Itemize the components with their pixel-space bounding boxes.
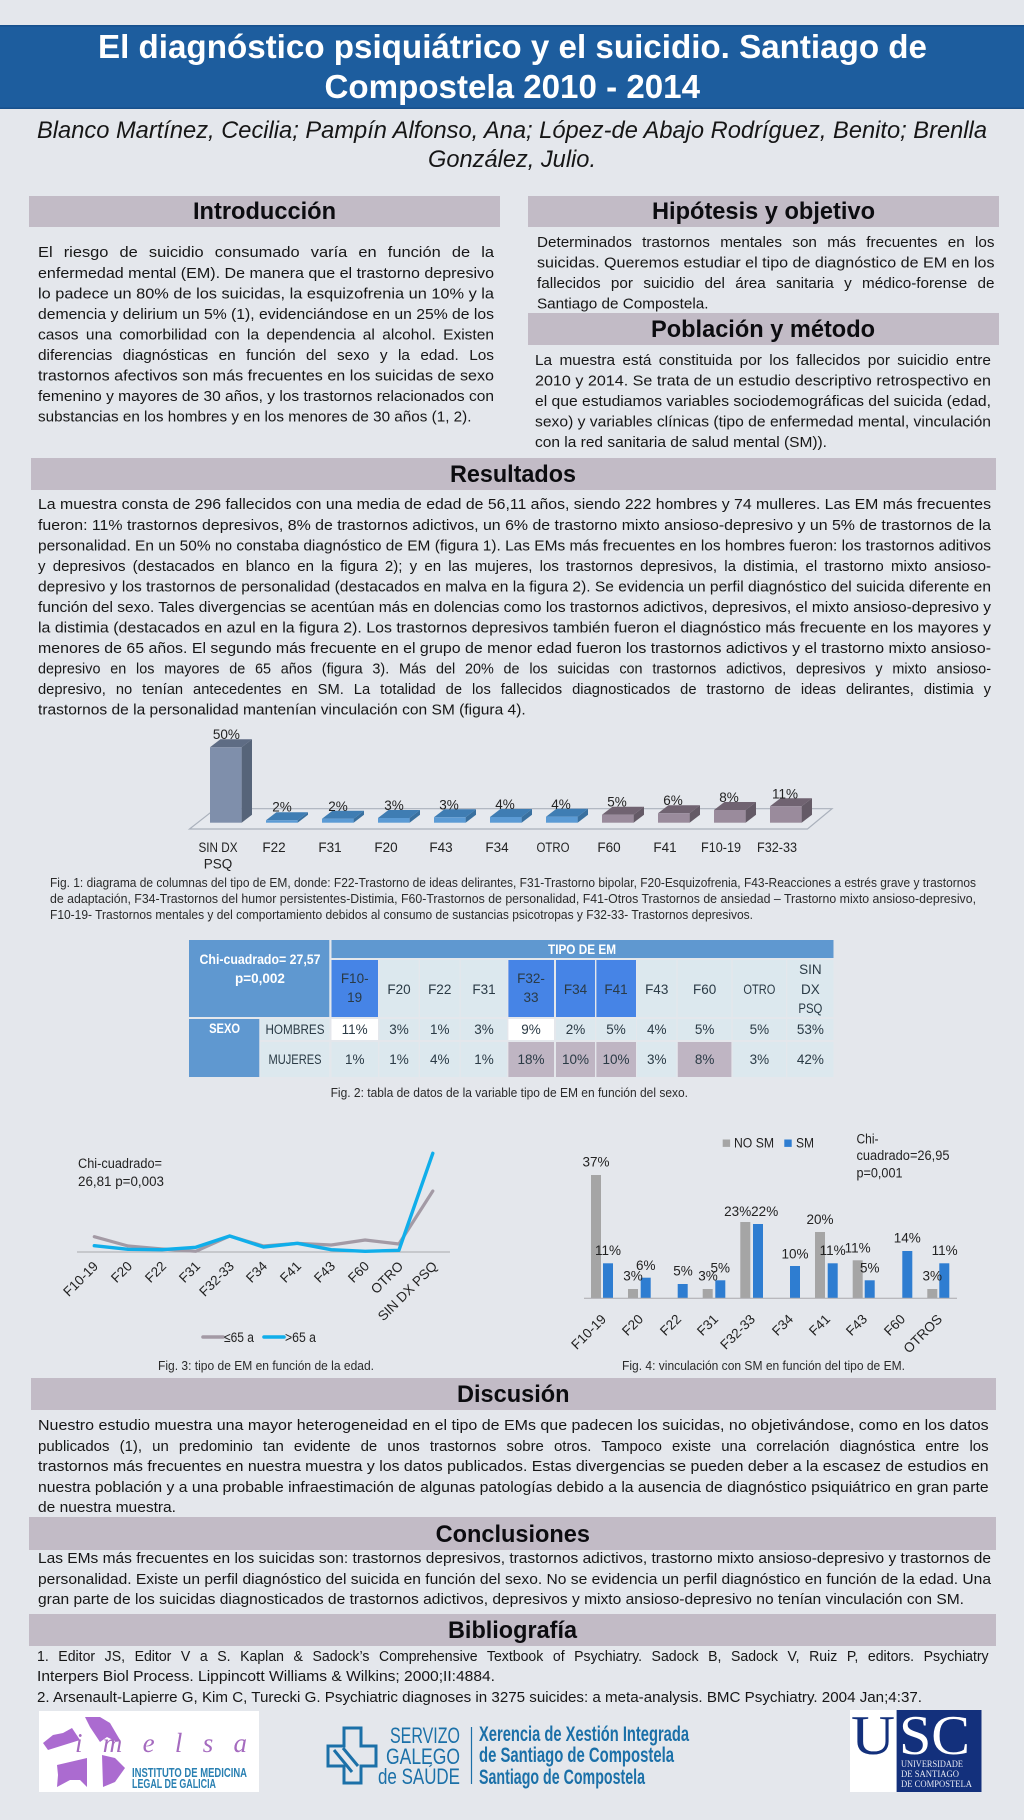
text: resultados: y depresivos (destacados en blanco en la figura 2); y en las mujeres, los trastornos depresivos, la distimia, el trastorno mixto ansioso- — [38, 558, 991, 575]
value labels: 50% — [213, 727, 240, 742]
caption: figure 3: Fig. 3: tipo de EM en función de la edad. — [158, 1358, 374, 1373]
table row: mujeres: 1% — [345, 1052, 364, 1067]
x axis labels: F20 — [108, 1259, 135, 1286]
text: resultados: La muestra consta de 296 fallecidos con una media de edad de 56,11 años, siendo 222 hombres y 74 mulleres. Las EM más frecuentes — [38, 496, 991, 513]
table column headers: F10- — [341, 971, 369, 986]
heading: hipótesis y objetivo — [528, 196, 999, 227]
text: población y método: el que estudiamos variables sociodemográficas del suicida (edad, — [535, 393, 991, 410]
text: resultados: depresivo, no tenían antecedentes en SM. La totalidad de los fallecidos diagnosticados de trastorno de ideas delirantes, distimia y — [38, 681, 991, 698]
axis labels — [198, 840, 797, 872]
heading: discusión: Discusión — [457, 1381, 570, 1408]
title banner — [0, 25, 1024, 109]
bar: F32-33 11% — [770, 798, 812, 823]
value labels: 3% — [923, 1269, 942, 1284]
table row: hombres: 5% — [606, 1022, 626, 1037]
table row: mujeres: 1% — [474, 1052, 494, 1067]
value labels: 10% — [781, 1246, 809, 1261]
table column headers: F43 — [645, 982, 668, 997]
table column headers: F31 — [472, 982, 496, 997]
table column headers: 33 — [523, 990, 539, 1005]
text: conclusiones: Las EMs más frecuentes en los suicidas son: trastornos depresivos, trastornos adictivos, trastorno mixto ansioso-depresivo y trastornos de — [38, 1550, 991, 1567]
authors: Blanco Martínez, Cecilia; Pampín Alfonso, Ana; López-de Abajo Rodríguez, Benito; Brenlla — [37, 117, 987, 144]
legend: ≤65 a — [224, 1330, 254, 1345]
x axis labels: F43 — [843, 1312, 870, 1339]
value labels: 3% — [439, 798, 459, 813]
table row: mujeres: 42% — [797, 1052, 824, 1067]
value labels: 5% — [711, 1260, 730, 1275]
text: introducción: femenino y mayores de 30 años, y los trastornos relacionados con — [38, 388, 494, 405]
table column headers: PSQ — [798, 1001, 822, 1016]
text: población y método: sexo) y variables clínicas (tipo de enfermedad mental, vinculación — [535, 414, 991, 430]
table row header: sexo: SEXO — [209, 1021, 240, 1036]
bar: F34 4% — [490, 809, 532, 823]
table row: hombres: HOMBRES — [266, 1022, 324, 1037]
value labels — [213, 727, 798, 814]
table column headers: F32- — [517, 971, 545, 986]
value labels: 5% — [673, 1264, 693, 1279]
value labels: 4% — [551, 797, 571, 812]
legend: SM — [796, 1136, 814, 1150]
value labels: 8% — [719, 790, 739, 805]
table row: hombres: 1% — [430, 1022, 449, 1037]
value labels: 3% — [623, 1269, 643, 1284]
text: hipótesis y objetivo: Santiago de Compostela. — [537, 296, 708, 312]
value labels: 14% — [894, 1231, 921, 1246]
text: resultados: función del sexo. Tales divergencias se acentúan más en dolencias como los trastornos adictivos, depresivos, el mixto ansioso-depresivo y — [38, 599, 992, 616]
value labels: 2% — [328, 799, 348, 814]
value labels: 11% — [932, 1243, 958, 1258]
heading: conclusiones — [29, 1517, 996, 1550]
axis labels: F32-33 — [757, 840, 797, 855]
text: discusión: nuestra población y a una probable infraestimación de algunas patologías debido a la ausencia de diagnóstico psiquiátrico en gran parte — [38, 1479, 989, 1496]
text: introducción: El riesgo de suicidio consumado varía en función de la — [38, 244, 495, 261]
logo: Servizo Galego de Saúde: SERVIZO — [390, 1723, 460, 1748]
value labels: 23% — [724, 1204, 751, 1219]
table column headers: F34 — [564, 982, 588, 997]
x axis labels: F60 — [881, 1312, 908, 1339]
heading: hipótesis y objetivo: Hipótesis y objetivo — [652, 198, 875, 225]
logo: USC: U — [851, 1705, 895, 1767]
x axis labels: F32-33 — [196, 1259, 237, 1299]
bar: F31 2% — [322, 811, 364, 823]
heading: discusión — [31, 1378, 996, 1410]
value labels: 20% — [806, 1212, 834, 1227]
axis labels: SIN DX — [198, 840, 238, 855]
table column headers: DX — [801, 982, 820, 997]
line: over 65 years — [94, 1153, 433, 1251]
table row: mujeres: 10% — [602, 1052, 630, 1067]
legend — [203, 1330, 316, 1345]
text: discusión: trastornos más frecuentes en nuestra muestra y los datos publicados. Estas divergencias se pueden deber a la escasez de estudios en — [38, 1458, 989, 1475]
text: discusión: Nuestro estudio muestra una mayor heterogeneidad en el tipo de EMs que padecen los suicidas, no objetivándose, como en los datos — [38, 1417, 989, 1434]
text: discusión: de nuestra muestra. — [38, 1499, 176, 1516]
logo: IMELGA — [39, 1711, 259, 1792]
table row: hombres: 2% — [566, 1022, 585, 1037]
annotation: chi-square — [856, 1132, 950, 1180]
table column headers: F60 — [693, 982, 716, 997]
icon: cross — [328, 1728, 376, 1783]
value labels: 3% — [698, 1269, 718, 1284]
annotation: chi-square: p=0,001 — [856, 1166, 902, 1180]
axis labels: F10-19 — [701, 840, 741, 855]
panel: bibliografía — [29, 1614, 996, 1706]
text: resultados: la distimia (destacados en azul en la figura 2). Los trastornos depresivos también fueron el diagnóstico más frecuente en los mayores y — [38, 620, 992, 636]
caption: figure 4: Fig. 4: vinculación con SM en función del tipo de EM. — [622, 1358, 905, 1373]
panel: hipótesis y objetivo — [528, 196, 999, 312]
table corner: chi-square: p=0,002 — [235, 971, 285, 986]
annotation: chi-square: Chi- — [856, 1132, 878, 1146]
text: resultados: menores de 65 años. El segundo más frecuente en el grupo de menor edad fueron los trastornos adictivos y el trastorno mixto ansioso- — [38, 640, 991, 657]
text: conclusiones: gran parte de los suicidas diagnosticados de trastornos adictivos, depresivos y mixto ansioso-depresivo no tenían vinculación con SM. — [38, 1591, 964, 1608]
text: población y método: con la red sanitaria de salud mental (SM)). — [535, 434, 827, 451]
table row: mujeres: 3% — [647, 1052, 666, 1067]
logo: IMELGA: INSTITUTO DE MEDICINA — [132, 1766, 247, 1780]
axis labels: F22 — [262, 840, 286, 855]
bar: F60 5% — [602, 807, 644, 823]
table row: mujeres — [260, 1042, 834, 1077]
heading: población y método — [528, 313, 999, 345]
logo: IMELGA: imelsa — [75, 1728, 247, 1758]
text: introducción: trastornos afectivos son más frecuentes en los suicidas de sexo — [38, 368, 494, 384]
logo: Servizo Galego de Saúde — [328, 1723, 689, 1789]
table column headers: F41 — [604, 982, 628, 997]
value labels: 5% — [860, 1260, 879, 1275]
heading: conclusiones: Conclusiones — [436, 1521, 590, 1548]
value labels: 6% — [663, 793, 683, 808]
text: introducción: diferencias diagnósticas en función del sexo y la edad. Los — [38, 347, 494, 364]
bar: OTRO 4% — [546, 809, 588, 823]
table row: mujeres: 1% — [389, 1052, 409, 1067]
bar: F20 3% — [378, 810, 420, 823]
value labels: 11% — [845, 1240, 871, 1255]
axis labels: F43 — [429, 840, 453, 855]
value labels: 22% — [751, 1204, 778, 1219]
table row: hombres: 3% — [474, 1022, 494, 1037]
text: resultados: depresivo y los trastornos de personalidad (destacados en malva en la figura 2). Se evidencia un perfil diagnóstico del suicida diferente en — [38, 578, 991, 596]
text: resultados — [38, 496, 992, 718]
panel: población y método — [528, 313, 999, 451]
bar: F22 2% — [266, 812, 308, 823]
logo: USC: DE SANTIAGO — [901, 1769, 959, 1779]
text: hipótesis y objetivo — [537, 234, 994, 312]
text: introducción: substancias en los hombres y en los menores de 30 años (1, 2). — [38, 408, 472, 426]
text: discusión: publicados (1), un predominio tan evidente de unos trastornos sobre otros. Tampoco existe una correlación diagnóstica entre los — [38, 1438, 989, 1455]
legend: NO SM — [734, 1136, 774, 1150]
text: población y método: La muestra está constituida por los fallecidos por suicidio entre — [535, 352, 991, 369]
value labels: 37% — [582, 1155, 610, 1170]
panel: discusión — [31, 1378, 996, 1516]
axis labels: F60 — [597, 840, 621, 855]
value labels: 11% — [595, 1243, 621, 1258]
text: bibliografía — [37, 1648, 989, 1706]
value labels: 5% — [607, 795, 627, 810]
logo: Servizo Galego de Saúde: de SAÚDE — [378, 1764, 460, 1789]
authors: González, Julio. — [428, 146, 596, 173]
value labels: 11% — [820, 1243, 846, 1258]
text: resultados: personalidad. En un 50% no constaba diagnóstico de EM (figura 1). Las EMs más frecuentes en los hombres fueron: los trastornos aditivos — [38, 538, 991, 554]
x axis labels: F34 — [769, 1311, 796, 1339]
annotation: chi-square: 26,81 p=0,003 — [78, 1174, 164, 1189]
text: resultados: trastornos de la personalidad mantenían vinculación con SM (figura 4). — [38, 702, 526, 718]
chart: figure 3, line chart — [60, 1153, 450, 1345]
x axis labels: F22 — [142, 1259, 169, 1286]
legend — [723, 1136, 814, 1150]
x axis labels: F32-33 — [717, 1312, 758, 1352]
text: introducción: casos una comorbilidad con la dependencia al alcohol. Existen — [38, 326, 494, 344]
x axis labels: F10-19 — [568, 1312, 609, 1352]
logo: Servizo Galego de Saúde: Xerencia de Xestión Integrada — [479, 1723, 689, 1746]
bar: SIN DX PSQ 50% — [210, 739, 252, 823]
x axis labels: F34 — [243, 1258, 270, 1286]
heading: resultados — [31, 458, 996, 490]
table row: mujeres: 18% — [517, 1052, 545, 1067]
table column headers: OTRO — [743, 982, 775, 997]
text: discusión — [38, 1417, 989, 1516]
x axis labels: OTROS — [901, 1312, 945, 1356]
table column headers: F20 — [387, 982, 411, 997]
x axis labels: F60 — [345, 1259, 372, 1286]
text: resultados: depresivo en los mayores de 65 años (figura 3). Más del 20% de los suicidas con trastornos adictivos, depresivos y mixto ansioso- — [38, 660, 991, 678]
table row: mujeres: MUJERES — [268, 1052, 322, 1067]
caption: figure 1: de adaptación, F34-Trastornos del humor persistentes-Distimia, F60-Trastornos de personalidad, F41-Otros Trastornos de ansiedad – Trastorno mixto ansioso-depresivo, — [50, 891, 976, 906]
panel: resultados — [31, 458, 996, 1373]
text: resultados: fueron: 11% trastornos depresivos, 8% de trastornos adictivos, un 6% de trastorno mixto ansioso-depresivo y un 5% de trastornos de la — [38, 517, 992, 534]
bar: F41 6% — [658, 805, 700, 823]
text: introducción: demencia y delirium un 5% (1), evidenciándose en un 25% de los — [38, 306, 494, 323]
table row: hombres: 53% — [797, 1022, 824, 1037]
caption: figure 1: F10-19- Trastornos mentales y del comportamiento debidos al consumo de sustancias psicotropas y F32-33- Trastornos depresivos. — [50, 907, 753, 922]
logo: Servizo Galego de Saúde: GALEGO — [386, 1744, 460, 1769]
text: introducción: lo padece un 80% de los suicidas, la esquizofrenia un 10% y la — [38, 286, 495, 302]
heading: bibliografía: Bibliografía — [448, 1617, 578, 1644]
bar: F43 3% — [434, 809, 476, 823]
logo: Servizo Galego de Saúde: de Santiago de Compostela — [479, 1744, 674, 1767]
chart: figure 4, clustered columns — [568, 1132, 958, 1356]
bar: F10-19 8% — [714, 802, 756, 823]
table row: hombres: 4% — [647, 1022, 666, 1037]
chart: figure 1, 3D columns — [190, 727, 832, 872]
axis labels: OTRO — [536, 840, 570, 855]
x axis labels: F10-19 — [60, 1259, 101, 1299]
logo: USC: SC — [899, 1705, 970, 1767]
text: conclusiones — [38, 1550, 992, 1608]
annotation: chi-square — [78, 1156, 164, 1189]
axis labels: F20 — [374, 840, 398, 855]
table row header: sexo — [189, 1019, 259, 1077]
axis labels: F41 — [653, 840, 677, 855]
x axis labels — [60, 1258, 440, 1324]
heading: introducción — [29, 196, 500, 227]
x axis labels: F31 — [694, 1312, 721, 1339]
value labels — [582, 1155, 958, 1284]
heading: resultados: Resultados — [450, 461, 576, 488]
value labels: 6% — [636, 1258, 655, 1273]
table: figure 2 — [189, 940, 834, 1077]
axis labels: PSQ — [204, 856, 232, 872]
line: up to 65 years — [94, 1191, 433, 1251]
table header: tipo de EM: TIPO DE EM — [548, 942, 616, 957]
panel: introducción — [29, 196, 500, 426]
table row: mujeres: 3% — [750, 1052, 769, 1067]
text: introducción: enfermedad mental (EM). De manera que el trastorno depresivo — [38, 265, 494, 282]
logo: Servizo Galego de Saúde: Santiago de Compostela — [479, 1766, 645, 1789]
table column headers — [332, 960, 834, 1017]
x axis labels: F20 — [619, 1312, 646, 1339]
table column headers: 19 — [347, 990, 362, 1005]
table row: mujeres: 10% — [562, 1052, 589, 1067]
x axis labels — [568, 1311, 945, 1356]
x axis labels: F41 — [277, 1259, 304, 1286]
table corner: chi-square: Chi-cuadrado= 27,57 — [200, 952, 320, 967]
table row: hombres: 5% — [750, 1022, 769, 1037]
bars: no SM — [591, 1175, 937, 1298]
logo: USC: UNIVERSIDADE — [901, 1759, 963, 1769]
text: conclusiones: personalidad. Existe un perfil diagnóstico del suicida en función del sexo. No se evidencia un perfil diagnóstico en función de la edad. Una — [38, 1571, 992, 1588]
x axis labels: OTRO — [368, 1259, 406, 1297]
value labels: 3% — [384, 798, 404, 813]
panel: conclusiones — [29, 1517, 996, 1608]
text: hipótesis y objetivo: fallecidos por suicidio del área sanitaria y médico-forense de — [537, 275, 994, 292]
logo: USC: DE COMPOSTELA — [901, 1779, 972, 1789]
caption: figure 1 — [50, 875, 976, 922]
table corner: chi-square — [189, 940, 329, 1017]
x axis labels: F41 — [806, 1312, 833, 1339]
table column headers: SIN — [799, 962, 822, 977]
axis labels: F31 — [318, 840, 342, 855]
text: introducción — [38, 244, 495, 426]
value labels: 4% — [495, 797, 515, 812]
text: hipótesis y objetivo: suicidas. Queremos estudiar el tipo de diagnóstico de EM en los — [537, 254, 994, 272]
text: bibliografía: Interpers Biol Process. Lippincott Williams & Wilkins; 2000;II:4884. — [37, 1668, 495, 1685]
title banner: Compostela 2010 - 2014 — [324, 68, 701, 105]
annotation: chi-square: Chi-cuadrado= — [78, 1156, 162, 1171]
table row: mujeres: 4% — [430, 1052, 449, 1067]
table row: mujeres: 8% — [695, 1052, 714, 1067]
heading: población y método: Población y método — [651, 316, 875, 343]
logo: USC — [850, 1705, 982, 1792]
x axis labels: F31 — [176, 1259, 203, 1286]
table header: tipo de EM — [332, 940, 834, 958]
legend: >65 a — [285, 1330, 316, 1345]
table row: hombres — [260, 1019, 834, 1040]
heading: bibliografía — [29, 1614, 996, 1646]
value labels: 2% — [272, 799, 292, 814]
table row: hombres: 11% — [342, 1022, 368, 1037]
table row: hombres: 5% — [695, 1022, 714, 1037]
text: bibliografía: 2. Arsenault-Lapierre G, Kim C, Turecki G. Psychiatric diagnoses in 3275 suicides: a meta-analysis. BMC Psychiatry. 2004 Jan;4:37. — [37, 1689, 922, 1706]
authors — [37, 117, 987, 173]
x axis labels: SIN DX PSQ — [375, 1259, 440, 1324]
text: población y método: 2010 y 2014. Se trata de un estudio descriptivo retrospectivo en — [535, 372, 991, 390]
table row: hombres: 3% — [389, 1022, 409, 1037]
table row: hombres: 9% — [521, 1022, 541, 1037]
title banner: El diagnóstico psiquiátrico y el suicidio. Santiago de — [98, 28, 927, 65]
bars: SM — [603, 1224, 949, 1298]
text: población y método — [535, 352, 991, 451]
caption: figure 2: Fig. 2: tabla de datos de la variable tipo de EM en función del sexo. — [331, 1085, 688, 1100]
heading: introducción: Introducción — [193, 198, 336, 225]
text: bibliografía: 1. Editor JS, Editor V a S. Kaplan & Sadock’s Comprehensive Textbook of Psychiatry. Sadock B, Sadock V, Ruiz P, editors. Psychiatry — [37, 1648, 989, 1665]
logo: IMELGA: LEGAL DE GALICIA — [132, 1777, 216, 1791]
annotation: chi-square: cuadrado=26,95 — [856, 1148, 950, 1163]
table column headers: F22 — [428, 982, 451, 997]
value labels: 11% — [772, 786, 798, 802]
text: hipótesis y objetivo: Determinados trastornos mentales son más frecuentes en los — [537, 234, 994, 251]
axis labels: F34 — [485, 840, 509, 855]
x axis labels: F43 — [311, 1259, 338, 1286]
x axis labels: F22 — [657, 1312, 684, 1339]
